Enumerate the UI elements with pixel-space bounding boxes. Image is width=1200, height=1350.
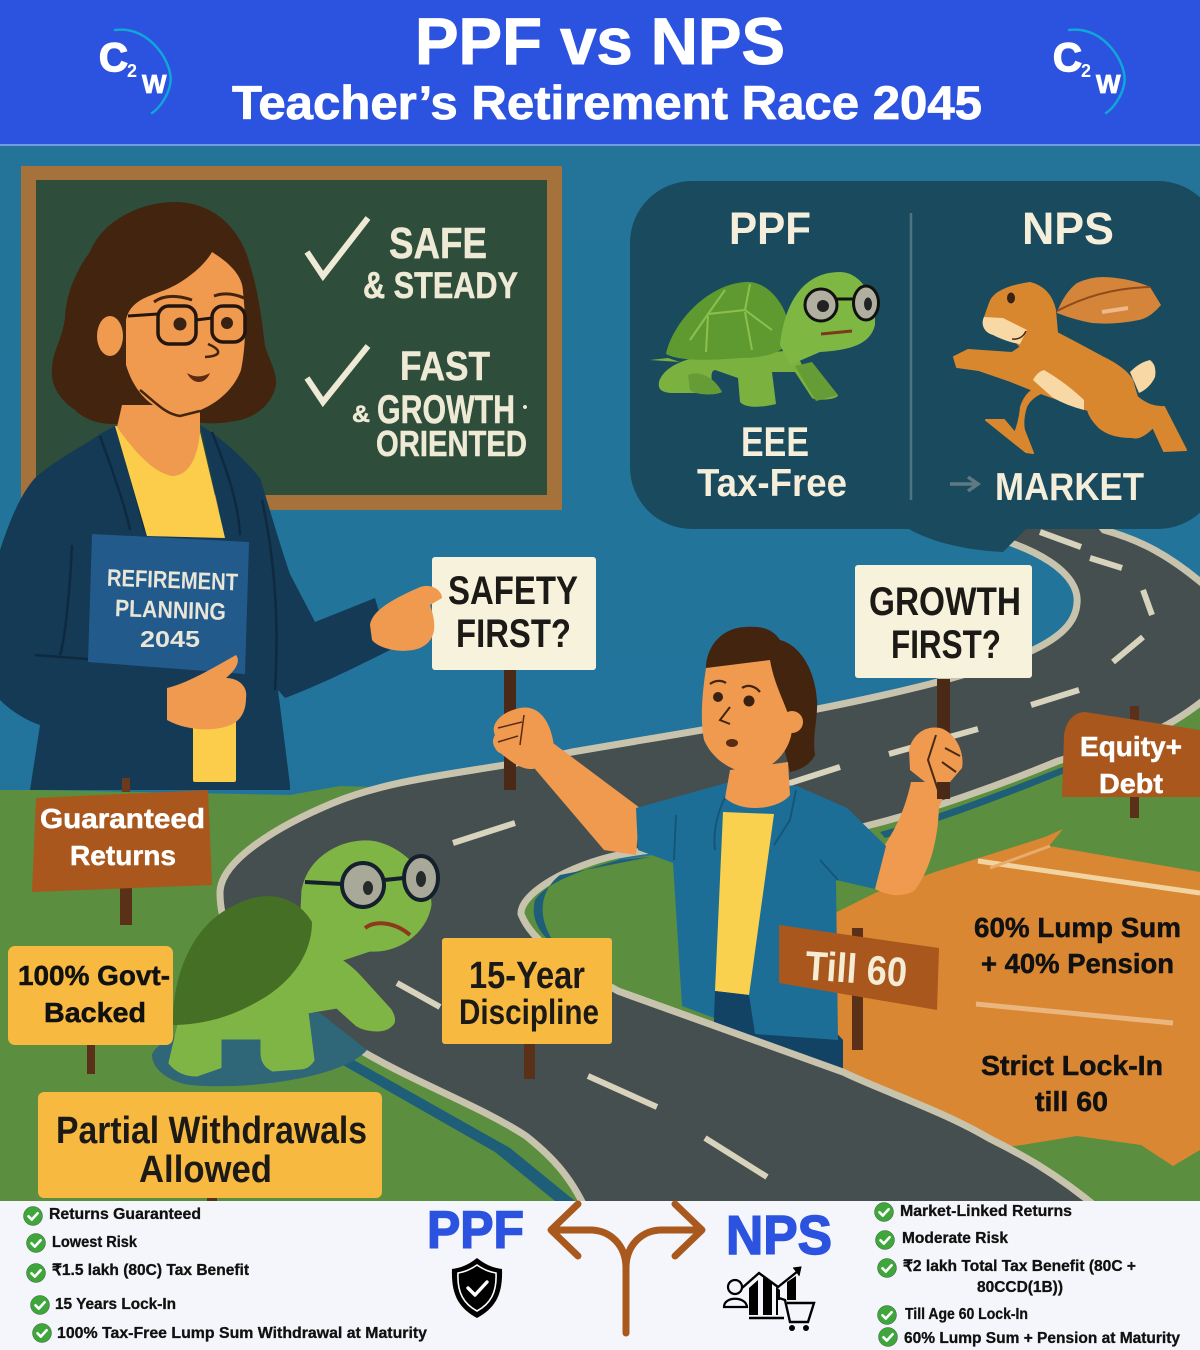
planning book: REFIREMENT [107,565,239,596]
list: PPF features: Lowest Risk [52,1234,137,1251]
board text: fast and growth oriented: ORIENTED [376,423,527,464]
orange block ground [833,829,1200,1166]
text: 60 percent lump sum plus 40 percent pension: + 40% Pension [981,948,1174,979]
board text: fast and growth oriented: & [352,401,370,428]
winding road [220,505,1200,1210]
logo left [99,30,171,113]
sign: 100% govt-backed: 100% Govt- [18,960,170,991]
sign: till 60 [779,925,939,1050]
board text: safe and steady [363,219,518,306]
child hair [706,627,817,772]
bottom summary panel [0,1201,1200,1350]
planning book: PLANNING [115,595,226,626]
logo right: C [1053,36,1082,80]
sign: 100% govt-backed: Backed [44,997,146,1028]
sign: partial withdrawals allowed [38,1092,382,1201]
list: NPS features: 60% Lump Sum + Pension at Maturity [904,1330,1180,1347]
teacher face [97,252,245,416]
child pants visible panel [714,991,755,1034]
logo left: W [142,69,167,99]
board text: safe and steady: & STEADY [363,265,518,306]
child face [702,660,803,773]
sign: guaranteed returns: Returns [70,840,176,871]
logo left: C [99,36,128,80]
board text: fast and growth oriented: GROWTH [377,388,515,432]
list: NPS features: ₹2 lakh Total Tax Benefit (80C + [903,1258,1136,1275]
title: PPF vs NPS [415,4,785,78]
list: NPS features: Market-Linked Returns [900,1203,1072,1220]
child right fist [909,727,963,790]
icon: small turtle [650,272,878,407]
sign: equity plus debt: Equity+ [1080,731,1182,762]
sign: guaranteed returns: Guaranteed [40,803,205,834]
road edge over child [618,991,843,1072]
text: 60 percent lump sum plus 40 percent pension: 60% Lump Sum [974,912,1181,943]
sign: safety first: SAFETY [448,569,578,613]
list: PPF features [24,1206,427,1342]
sign: guaranteed returns [32,778,212,925]
list: NPS features: Till Age 60 Lock-In [905,1306,1028,1323]
subtitle: Teacher’s Retirement Race 2045 [232,76,982,129]
child left fist [493,707,553,769]
child shirt [715,812,774,995]
sign: equity plus debt: Debt [1099,768,1163,799]
post: safety first [504,670,516,790]
teacher hair [52,202,276,424]
bubble heading: NPS: NPS [1022,203,1114,254]
text: strict lock-in till 60: till 60 [1035,1086,1108,1117]
post: growth first [937,679,950,799]
teacher figure [0,202,390,790]
teacher jacket [0,425,390,790]
logo left: 2 [127,61,137,81]
child pants [714,993,843,1070]
sign: growth first: FIRST? [891,623,1001,667]
sign: 100% govt-backed [8,946,173,1074]
child jacket [636,782,886,1040]
logo right: W [1096,69,1121,99]
heading: PPF: PPF [427,1201,524,1260]
chalkboard [21,166,562,510]
sign: partial withdrawals allowed: Partial Withdrawals [56,1110,367,1152]
icon: investor chart and cart [724,1267,814,1331]
arrow: toward market [950,477,978,491]
list: NPS features: Moderate Risk [902,1230,1008,1247]
teacher neck [117,405,200,476]
background scene [0,145,1200,1201]
sign: growth first: GROWTH [869,580,1021,624]
list: PPF features: 100% Tax-Free Lump Sum Withdrawal at Maturity [57,1325,427,1342]
road dashes [397,532,1152,1177]
sign: partial withdrawals allowed: Allowed [139,1149,272,1191]
sign: growth first [855,565,1032,678]
list: NPS features: 80CCD(1B)) [977,1279,1063,1296]
child arms [535,743,950,895]
bubble label: market: MARKET [995,466,1144,509]
bubble label: EEE tax-free: Tax-Free [697,462,847,505]
child neck [725,762,790,808]
icon: large turtle [170,842,438,1075]
checkmark: safe [307,218,368,276]
checkmark: fast [307,346,368,402]
list: PPF features: 15 Years Lock-In [55,1296,176,1313]
text: 60 percent lump sum plus 40 percent pension [974,912,1181,979]
child figure [493,627,963,1072]
sign: safety first: FIRST? [456,612,571,656]
arrow: fork left and right [551,1204,702,1333]
sign: 15-year discipline: 15-Year [469,955,585,997]
board text: safe and steady: SAFE [389,219,487,268]
logo right [1053,30,1125,113]
icon: running rabbit [954,277,1186,453]
list: PPF features: Returns Guaranteed [49,1206,201,1223]
comparison speech bubble [630,181,1200,552]
list: PPF features: ₹1.5 lakh (80C) Tax Benefit [52,1262,249,1279]
sign: 15-year discipline [442,938,612,1079]
planning book: 2045 [140,626,200,652]
bubble label: EEE tax-free [697,418,847,505]
header band [0,0,1200,146]
icon: shield [452,1258,502,1318]
teacher shirt [115,426,225,538]
board text: fast and growth oriented [352,343,527,464]
board text: fast and growth oriented: FAST [400,343,490,389]
list: NPS features [874,1202,1180,1347]
teacher hand pointing [370,586,442,651]
sign: equity plus debt [1062,706,1200,818]
puddle under turtle [152,1013,367,1086]
sign: safety first [432,557,596,670]
sign: till 60: Till 60 [804,943,909,996]
bubble heading: PPF: PPF [729,203,811,254]
heading: NPS: NPS [726,1204,832,1266]
sign: 15-year discipline: Discipline [459,993,599,1032]
text: strict lock-in till 60 [981,1050,1163,1117]
bubble label: EEE tax-free: EEE [741,418,809,465]
planning book [88,534,249,674]
logo right: 2 [1081,61,1091,81]
teacher hand and shirt hem [167,655,246,782]
text: strict lock-in till 60: Strict Lock-In [981,1050,1163,1081]
